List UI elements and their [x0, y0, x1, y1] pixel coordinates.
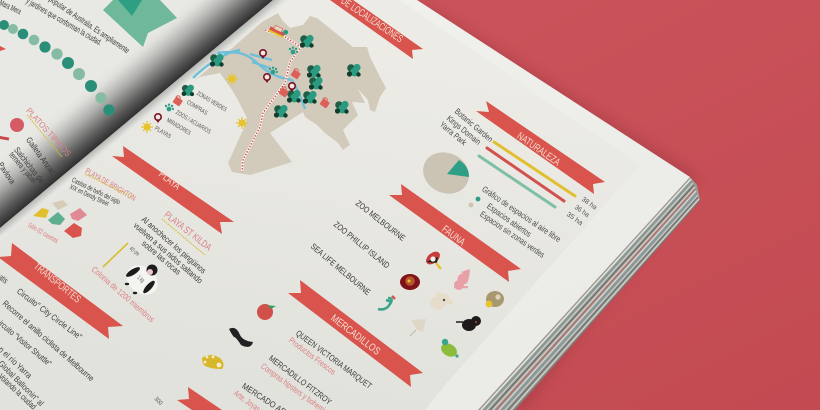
heading: platos tipicos: PLATOS TÍPICOS — [24, 106, 73, 159]
heading: playa de brighton — [84, 166, 138, 203]
markets list: Productos Frescos — [287, 335, 338, 377]
map legend: MIRADORES — [165, 117, 192, 137]
pie legend: Gráfico de espacios al aire libre — [480, 184, 563, 244]
map legend: COMPRAS — [185, 99, 209, 117]
nature park names: Yarra Park — [438, 119, 469, 148]
gutter shadow left — [0, 0, 273, 228]
map legend — [141, 85, 228, 140]
markets list: QUEEN VICTORIA MARQUET — [294, 328, 374, 391]
fauna labels: SEA LIFE MELBOURNE — [309, 241, 373, 297]
map legend: ZONAS VERDES — [195, 90, 228, 114]
nature park names: Botanic Garden — [453, 106, 495, 144]
icon: stingray — [410, 319, 426, 336]
st kilda text: sobre las rocas — [140, 238, 183, 277]
page stack edge — [478, 177, 700, 410]
transport list: Recorre el anillo ciclista de Melbourne — [1, 298, 97, 383]
gutter shadow right — [0, 0, 290, 242]
banner: fauna — [389, 184, 521, 282]
left page: red pointer — [0, 46, 6, 51]
icon: bear — [486, 291, 504, 307]
banner: mercadillos: MERCADILLOS — [328, 312, 382, 358]
nature bar chart: 35 ha — [565, 211, 584, 227]
pie legend: Espacios abiertos — [485, 201, 533, 239]
penguin caption: Colonia de 1200 miembros — [90, 264, 157, 324]
pie legend: Espacios sin zonas verdes — [478, 209, 547, 260]
map legend: ZOOS / ACUARIOS — [174, 109, 212, 136]
river — [193, 50, 305, 109]
left page: top text — [0, 0, 132, 55]
page shadow on background — [420, 0, 698, 410]
icon: tasmanian devil — [456, 316, 481, 331]
banner: naturaleza: NATURALEZA — [515, 130, 562, 169]
map — [193, 13, 386, 175]
brighton text — [69, 177, 121, 208]
fauna labels — [309, 198, 408, 297]
st kilda text: vuelven a sus nidos saltando — [132, 220, 205, 286]
small bar value: 300 — [153, 396, 164, 407]
st kilda text: Al anochecer los pingüinos — [140, 214, 208, 276]
fauna labels: ZOO PHILLIP ISLAND — [332, 219, 392, 270]
map legend: PLAYAS — [153, 125, 172, 140]
left page: green ribbon — [103, 0, 177, 47]
typical dishes list: ternera y jabalí — [7, 150, 40, 186]
left page: tree chain — [0, 20, 115, 116]
icon: koala — [430, 292, 453, 310]
icon: penguin — [121, 259, 163, 301]
nature park names: Kings Domain — [445, 113, 483, 147]
heading: playa de brighton: PLAYA DE BRIGHTON — [84, 166, 138, 203]
inner page panel tint — [0, 0, 640, 410]
typical dishes list: Salchichas de — [12, 145, 47, 185]
dotted route — [242, 30, 301, 172]
pie chart — [416, 145, 476, 201]
icon: penguin: 1 kg — [136, 274, 146, 284]
banner: naturaleza — [476, 101, 605, 194]
heading: playa st kilda: PLAYA ST KILDA — [162, 210, 213, 254]
brighton caption: Sólo 82 casetas — [26, 222, 59, 245]
icon: lion — [400, 274, 420, 290]
icon: seahorse — [378, 296, 395, 309]
fauna labels: ZOO MELBOURNE — [354, 198, 408, 243]
typical dishes list — [0, 135, 58, 186]
banner: transportes: TRANSPORTES — [31, 260, 83, 306]
typical dishes icons — [0, 118, 24, 141]
nature bar chart: 38 ha — [580, 196, 598, 212]
transport list: Circuito" City Circle Line" — [15, 286, 84, 342]
heading: playa st kilda — [162, 210, 213, 255]
magazine left page — [0, 0, 273, 228]
icon: tomato — [257, 304, 276, 320]
icon: parrot — [424, 249, 442, 269]
typical dishes list: Galleta Anzac — [24, 135, 58, 177]
icon: palette — [202, 355, 224, 369]
nature park names — [438, 106, 495, 148]
nature bar chart — [479, 142, 598, 227]
banner: transportes — [0, 243, 123, 339]
markets list — [232, 328, 374, 410]
brighton text: Casitas de baño del siglo — [70, 177, 121, 206]
penguin height marker: 40 cm — [128, 245, 141, 258]
banner: mercadillos — [288, 280, 423, 387]
icon: turtle — [439, 339, 459, 359]
icon: beach huts — [33, 200, 87, 238]
banner: playa — [112, 146, 234, 234]
nature bar chart: 36 ha — [573, 204, 590, 219]
animal icons — [378, 249, 504, 359]
banner: fauna: FAUNA — [439, 223, 467, 248]
icon: moustache — [229, 328, 253, 347]
penguin height marker — [103, 243, 141, 267]
brighton text: XIX en Dendy Street — [69, 184, 110, 208]
icon: pink cat — [454, 269, 470, 290]
banner: playa: PLAYA — [156, 168, 183, 193]
transport list — [0, 272, 97, 410]
banner: bottom cut off — [177, 387, 222, 410]
